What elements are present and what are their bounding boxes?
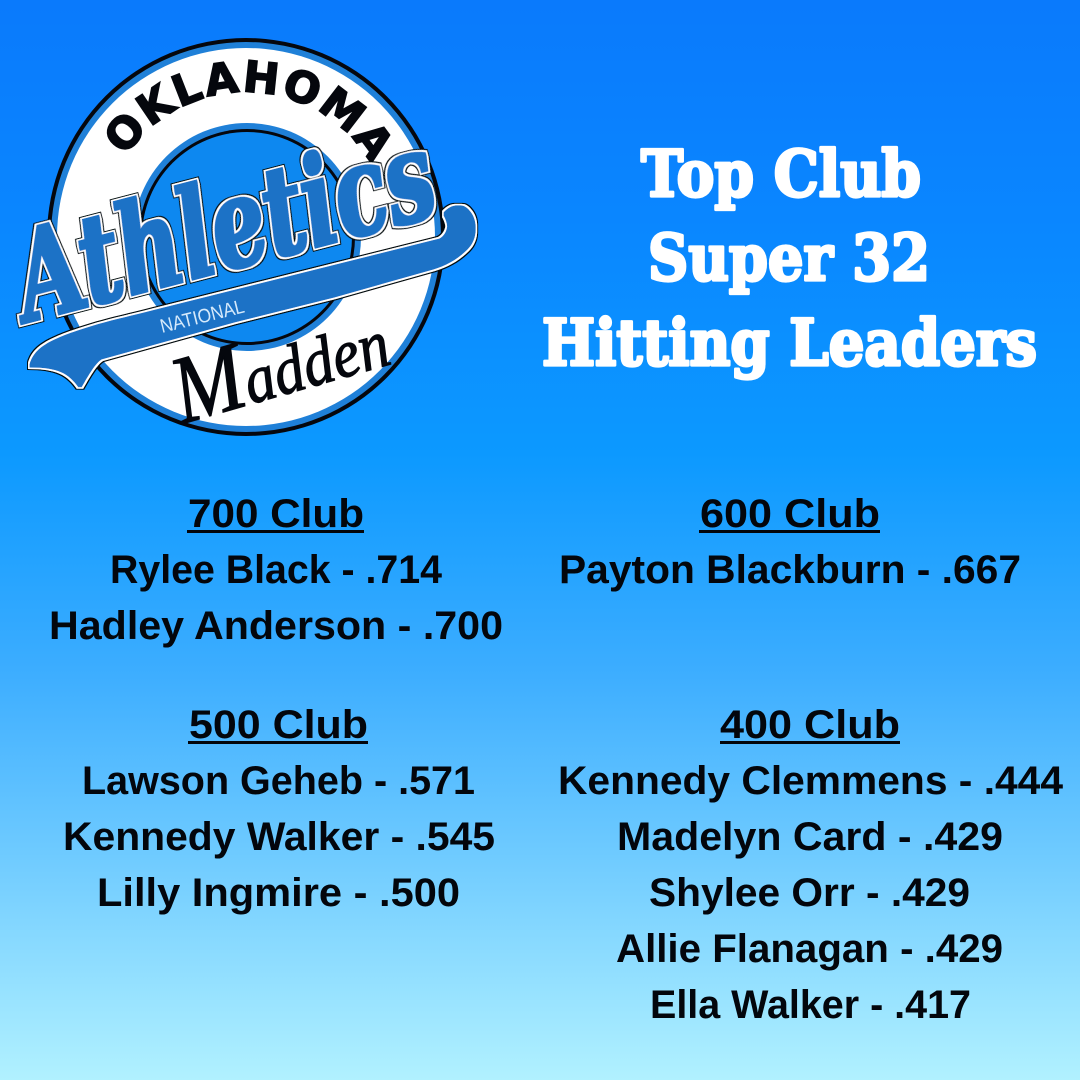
heading: 400 Club: 400 Club [720, 703, 900, 747]
logo script: Athletics: Athletics [0, 103, 450, 353]
heading: 700 Club: 700 Club [188, 492, 364, 536]
player: Madelyn Card: Madelyn Card - .429 [617, 815, 1003, 859]
logo: Oklahoma Athletics National Madden [0, 38, 478, 445]
logo text: National: NATIONAL [158, 296, 247, 338]
player: Ella Walker: Ella Walker - .417 [650, 983, 971, 1027]
player: Lawson Geheb: Lawson Geheb - .571 [82, 759, 475, 803]
panel: 500 Club [63, 703, 495, 915]
panel: 600 Club [559, 492, 1021, 592]
player: Lilly Ingmire: Lilly Ingmire - .500 [97, 871, 460, 915]
panel: 700 Club [49, 492, 503, 648]
logo ring [47, 38, 445, 436]
player: Kennedy Clemmens: Kennedy Clemmens - .444 [558, 759, 1064, 803]
logo swoosh [31, 207, 474, 386]
player: Hadley Anderson: Hadley Anderson - .700 [49, 604, 503, 648]
panel: 400 Club [558, 703, 1064, 1027]
player: Allie Flanagan: Allie Flanagan - .429 [616, 927, 1003, 971]
title line 1: Top Club [641, 137, 921, 212]
title line 2: Super 32 [648, 221, 930, 296]
heading: 500 Club: 500 Club [189, 703, 368, 747]
title [542, 137, 1037, 381]
logo script: Madden: Madden [157, 281, 399, 445]
player: Kennedy Walker: Kennedy Walker - .545 [63, 815, 495, 859]
player: Payton Blackburn: Payton Blackburn - .667 [559, 548, 1021, 592]
logo text: Oklahoma: OKLAHOMA [106, 59, 390, 162]
heading: 600 Club: 600 Club [700, 492, 880, 536]
player: Rylee Black: Rylee Black - .714 [110, 548, 443, 592]
player: Shylee Orr: Shylee Orr - .429 [649, 871, 970, 915]
